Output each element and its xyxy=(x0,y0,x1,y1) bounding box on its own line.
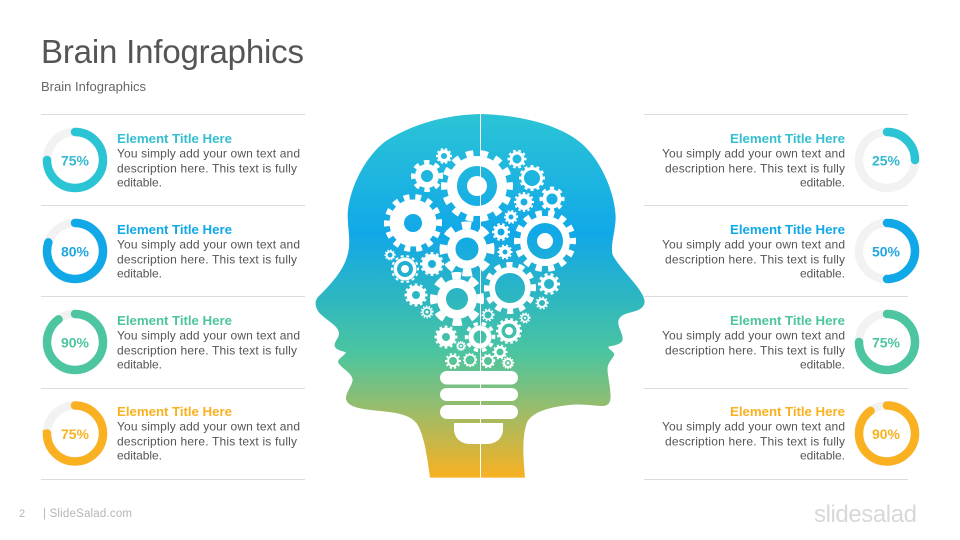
element title: Element Title Here xyxy=(730,313,845,328)
left element 1 xyxy=(47,131,300,190)
element title: Element Title Here xyxy=(117,222,232,237)
left element 2 xyxy=(47,222,300,280)
donut 75%: 75% xyxy=(872,334,901,350)
donut 50% xyxy=(859,223,915,279)
description: You simply add your own text and xyxy=(117,146,300,160)
left element 3 xyxy=(47,313,300,372)
element title: Element Title Here xyxy=(117,313,232,328)
description: You simply add your own text and xyxy=(662,420,845,434)
element title: Element Title Here xyxy=(730,404,845,419)
description xyxy=(662,238,845,280)
icon: bulb base xyxy=(454,423,503,444)
icon: bulb screw bars xyxy=(440,371,518,419)
footer: logo: slidesalad xyxy=(814,501,917,528)
left element 4 xyxy=(47,404,300,462)
description: editable. xyxy=(800,448,845,462)
donut 80% xyxy=(47,223,103,279)
donut 75% xyxy=(47,132,103,188)
description: description here. This text is fully xyxy=(117,252,297,266)
donut 90% xyxy=(47,314,103,370)
description: editable. xyxy=(117,358,162,372)
description: editable. xyxy=(800,358,845,372)
description: description here. This text is fully xyxy=(665,162,845,176)
title: Brain Infographics xyxy=(41,33,304,70)
description xyxy=(662,420,845,462)
donut 25% xyxy=(859,132,915,188)
head silhouette xyxy=(316,114,645,478)
donut 75% xyxy=(47,406,103,462)
description: You simply add your own text and xyxy=(662,328,845,342)
element title: Element Title Here xyxy=(117,131,232,146)
description xyxy=(662,328,845,372)
panel: left elements xyxy=(41,114,305,480)
description: description here. This text is fully xyxy=(117,344,297,358)
description xyxy=(117,420,300,462)
description: You simply add your own text and xyxy=(662,238,845,252)
donut 80%: 80% xyxy=(61,244,90,260)
description xyxy=(117,238,300,280)
donut 75% xyxy=(859,314,915,370)
donut 75%: 75% xyxy=(61,152,90,168)
element title: Element Title Here xyxy=(117,404,232,419)
description: editable. xyxy=(117,448,162,462)
description: editable. xyxy=(800,176,845,190)
donut 90%: 90% xyxy=(872,426,901,442)
donut 75%: 75% xyxy=(61,426,90,442)
donut 50%: 50% xyxy=(872,244,901,260)
description: You simply add your own text and xyxy=(117,420,300,434)
description: description here. This text is fully xyxy=(117,434,297,448)
description: You simply add your own text and xyxy=(662,146,845,160)
description: editable. xyxy=(117,176,162,190)
right element 2 xyxy=(662,222,915,280)
description: You simply add your own text and xyxy=(117,328,300,342)
description xyxy=(117,146,300,190)
description: description here. This text is fully xyxy=(665,434,845,448)
element title: Element Title Here xyxy=(730,222,845,237)
right element 1 xyxy=(662,131,915,190)
subtitle: Brain Infographics xyxy=(41,79,146,94)
donut 90% xyxy=(859,406,915,462)
donut 25%: 25% xyxy=(872,152,901,168)
footer: site name: | SlideSalad.com xyxy=(43,508,132,520)
description: You simply add your own text and xyxy=(117,238,300,252)
panel: right elements xyxy=(644,114,915,480)
description xyxy=(662,146,845,190)
description: description here. This text is fully xyxy=(117,162,297,176)
right element 3 xyxy=(662,313,915,372)
description: description here. This text is fully xyxy=(665,344,845,358)
description: description here. This text is fully xyxy=(665,252,845,266)
central illustration: head with light bulb xyxy=(316,114,645,478)
element title: Element Title Here xyxy=(730,131,845,146)
icon: gears xyxy=(385,149,573,368)
donut 90%: 90% xyxy=(61,334,90,350)
description xyxy=(117,328,300,372)
description: editable. xyxy=(117,266,162,280)
description: editable. xyxy=(800,266,845,280)
footer: page number: 2 xyxy=(19,508,25,520)
right element 4 xyxy=(662,404,915,462)
center divider line xyxy=(480,114,481,478)
